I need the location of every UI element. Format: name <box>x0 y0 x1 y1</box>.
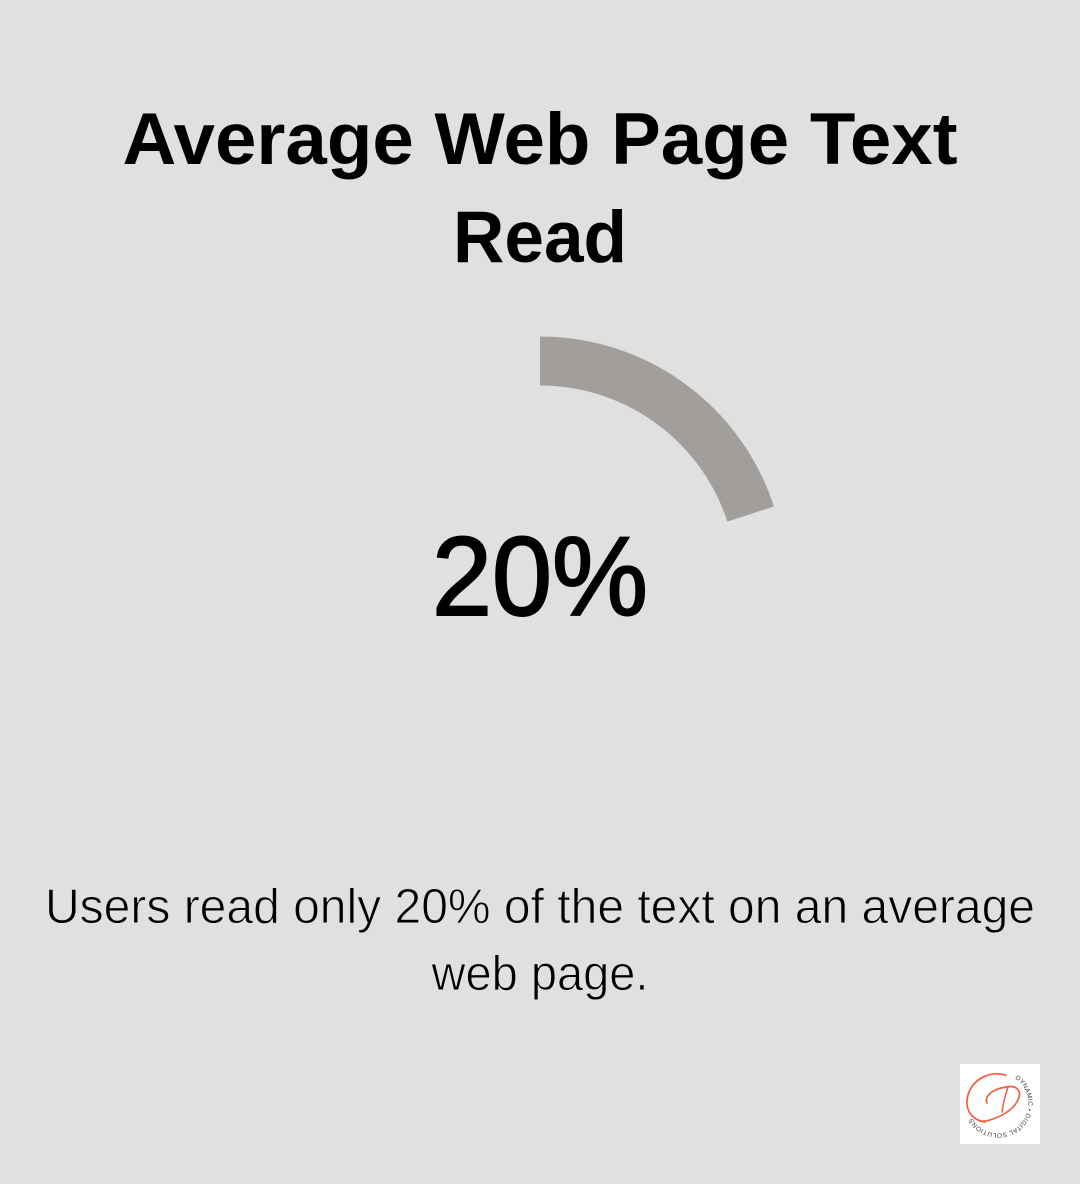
donut track <box>318 361 762 804</box>
logo circular text <box>971 1078 1028 1133</box>
donut chart: 20% <box>318 336 774 804</box>
title <box>122 99 958 278</box>
logo badge: DYNAMIC • DIGITAL SOLUTIONS <box>968 1075 1033 1138</box>
description <box>45 880 1035 1001</box>
center value: 20% <box>432 514 648 639</box>
logo ring and script D <box>967 1074 1019 1122</box>
description: web page. <box>431 947 648 1001</box>
logo background <box>960 1064 1040 1144</box>
donut value arc <box>540 336 774 522</box>
title: Read <box>453 197 627 278</box>
logo badge <box>960 1064 1040 1144</box>
description: Users read only 20% of the text on an average <box>45 880 1035 934</box>
title: Average Web Page Text <box>122 99 958 180</box>
